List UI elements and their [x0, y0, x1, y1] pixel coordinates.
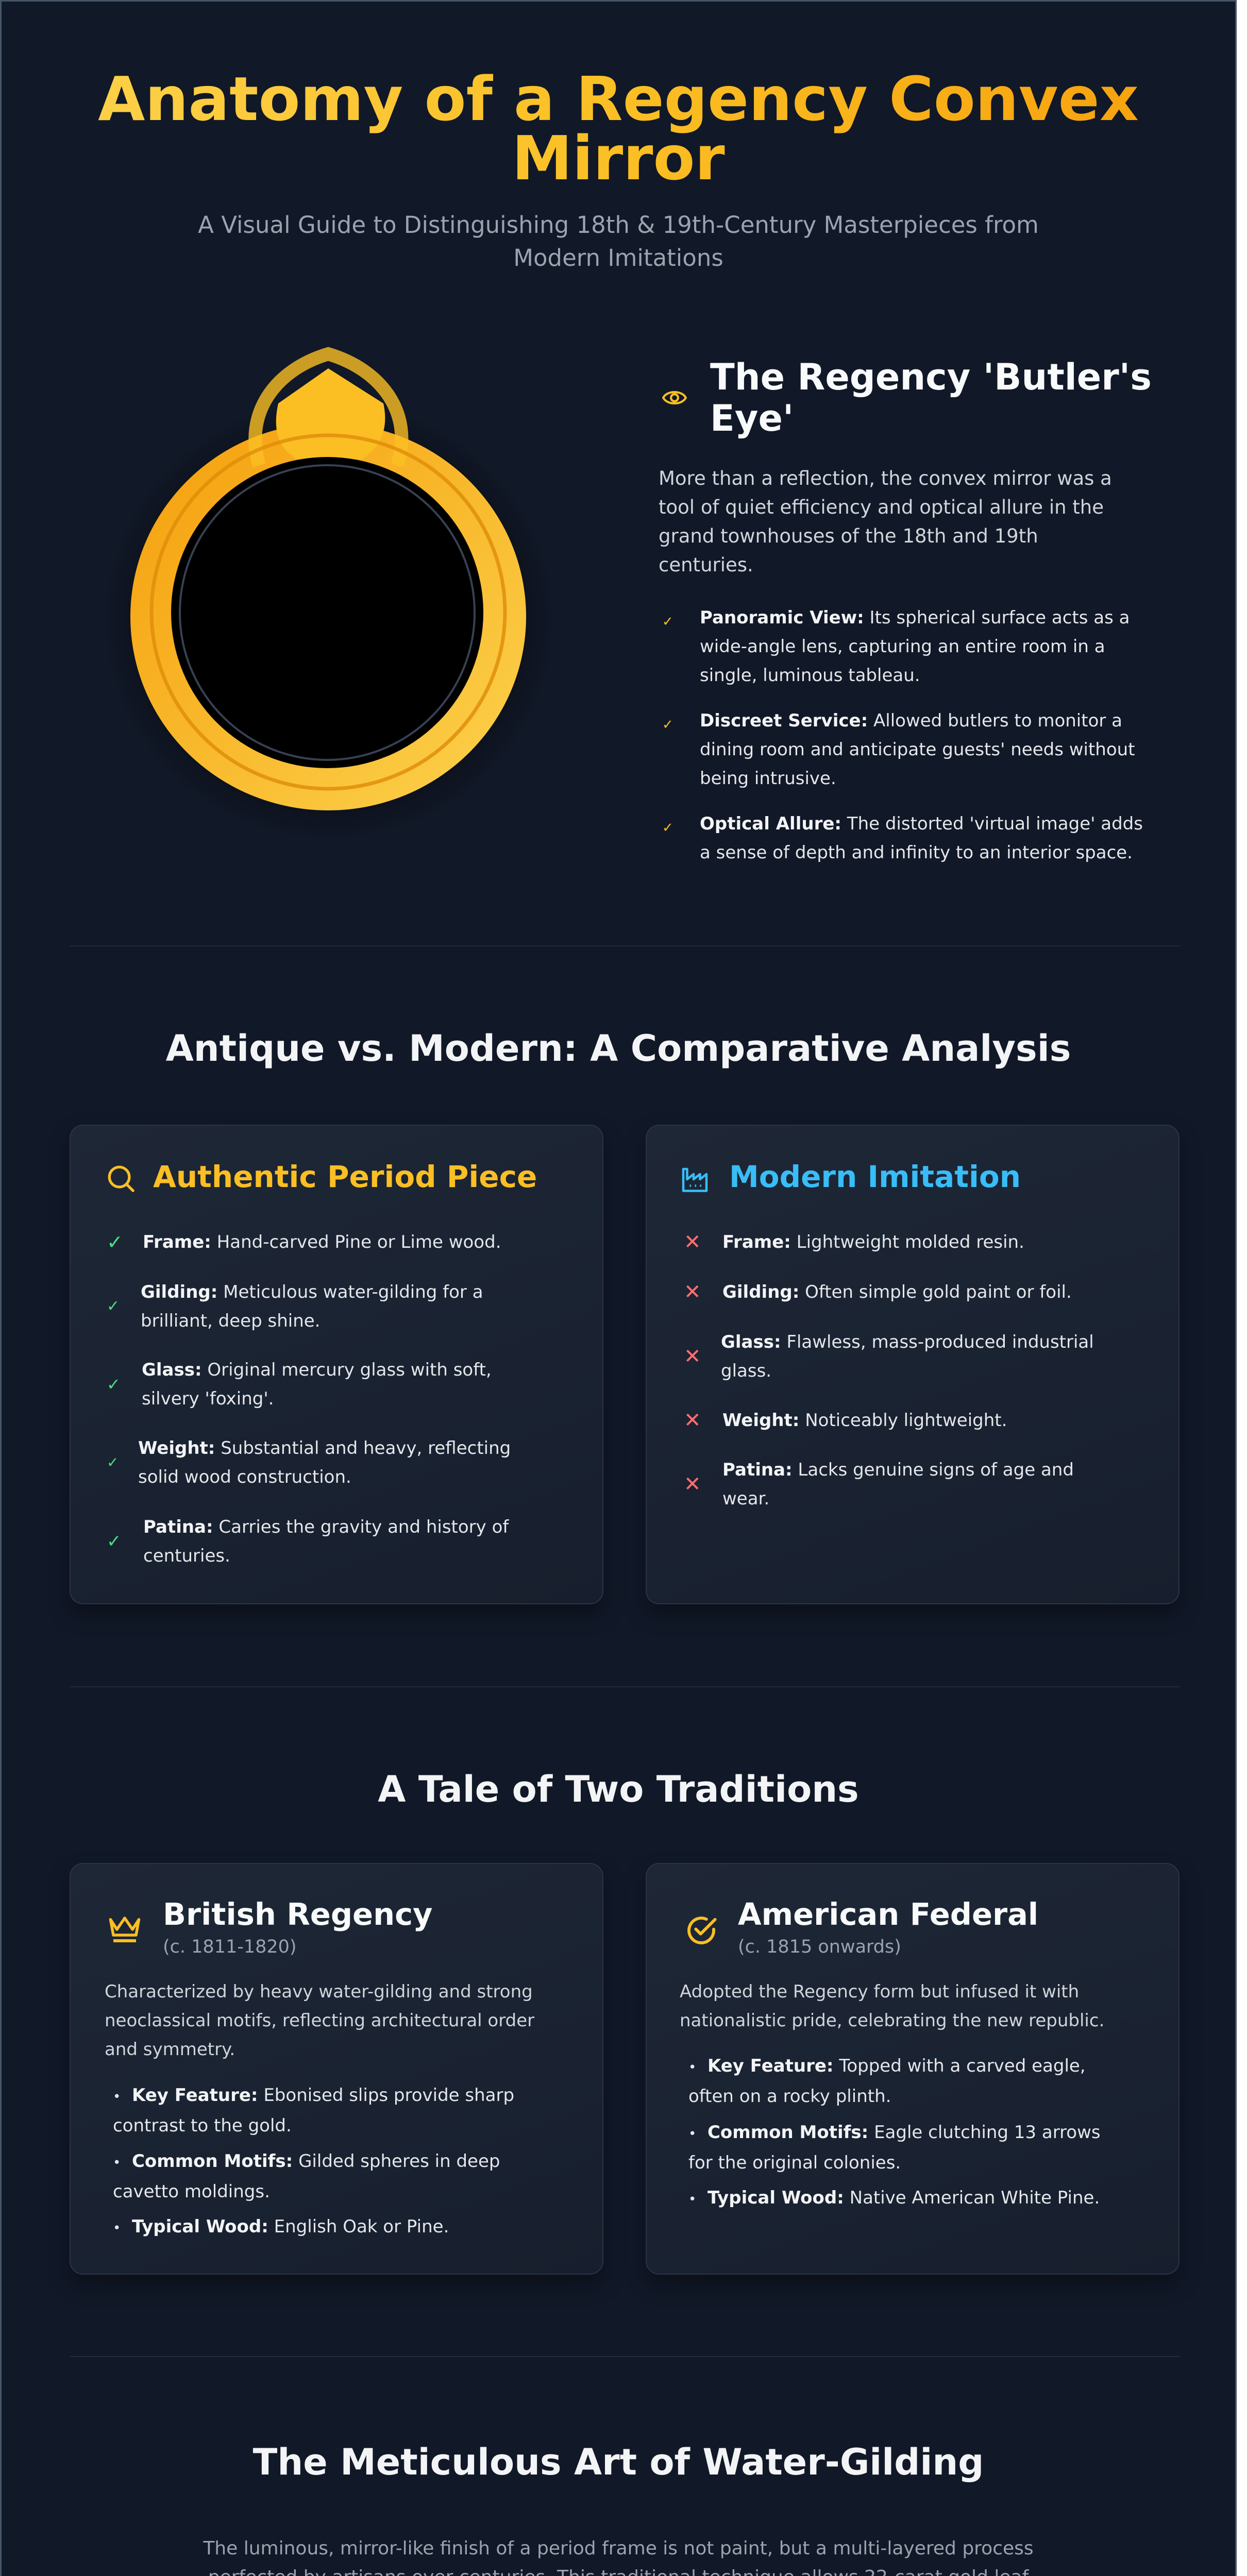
- list: hero bullets: Panoramic View: Its spherical surface acts as a: [700, 607, 1130, 628]
- list: features: [688, 2052, 1086, 2111]
- item: gilding: [107, 1282, 483, 1331]
- panel: modern imitation: Gilding: Often simple gold paint or foil.: [722, 1282, 1072, 1302]
- item: weight: [107, 1438, 511, 1487]
- panel: authentic period piece: ✓: [107, 1297, 120, 1315]
- icon: crown: [109, 1917, 140, 1942]
- list: hero bullets: single, luminous tableau.: [700, 665, 920, 686]
- date: (c. 1815 onwards): [738, 1937, 901, 1957]
- text: description: Adopted the Regency form but infused it with: [680, 1981, 1079, 2002]
- panel: authentic period piece: brilliant, deep shine.: [141, 1311, 320, 1331]
- panel: british regency: • Common Motifs: Gilded spheres in deep: [113, 2151, 500, 2172]
- list: features: often on a rocky plinth.: [688, 2086, 891, 2107]
- icon: factory: [682, 1167, 708, 1192]
- heading: butler's eye: The Regency 'Butler's: [710, 356, 1152, 398]
- heading: authentic: Authentic Period Piece: [153, 1159, 537, 1194]
- heading: antique vs modern: Antique vs. Modern: A Comparative Analysis: [166, 1027, 1071, 1070]
- text: description: neoclassical motifs, reflecting architectural order: [105, 2010, 534, 2031]
- panel: authentic period piece: ✓: [107, 1375, 121, 1394]
- list: hero bullets: Discreet Service: Allowed butlers to monitor a: [700, 710, 1122, 731]
- panel: authentic period piece: ✓: [107, 1531, 122, 1552]
- panel: authentic period piece: Patina: Carries the gravity and history of: [143, 1517, 509, 1537]
- heading: butler's eye: Eye': [710, 397, 794, 439]
- panel: modern imitation: Glass: Flawless, mass-produced industrial: [721, 1332, 1094, 1352]
- list: hero bullets: Optical Allure: The distorted 'virtual image' adds: [700, 814, 1143, 834]
- bullet: panoramic view: [662, 607, 1130, 686]
- panel: authentic period piece: [70, 1125, 603, 1604]
- panel: modern imitation: ✕: [684, 1230, 701, 1254]
- panel: authentic period piece: Frame: Hand-carved Pine or Lime wood.: [143, 1232, 501, 1252]
- panel: authentic period piece: ✓: [107, 1231, 123, 1253]
- text: hero paragraph: tool of quiet efficiency and optical allure in the: [659, 496, 1104, 518]
- panel: american federal: [646, 1863, 1179, 2275]
- panel: authentic period piece: ✓: [107, 1454, 119, 1471]
- icon: eye: [662, 391, 687, 404]
- title: Anatomy of a Regency Convex: [98, 63, 1139, 134]
- panel: modern imitation: Patina: Lacks genuine signs of age and: [722, 1460, 1074, 1480]
- item: patina: [684, 1460, 1074, 1509]
- heading: modern: Modern Imitation: [729, 1159, 1021, 1194]
- item: frame: [684, 1230, 1024, 1254]
- list: hero bullets: wide-angle lens, capturing an entire room in a: [700, 636, 1105, 657]
- panel: authentic period piece: Gilding: Meticulous water-gilding for a: [141, 1282, 483, 1302]
- text: description: Characterized by heavy water-gilding and strong: [105, 1981, 533, 2002]
- subtitle: [198, 211, 1039, 272]
- panel: modern imitation: glass.: [721, 1361, 771, 1381]
- text: description: nationalistic pride, celebrating the new republic.: [680, 2010, 1104, 2031]
- panel: american federal: for the original colonies.: [688, 2153, 901, 2173]
- heading: british regency: British Regency: [163, 1896, 433, 1932]
- title: [2, 70, 1235, 188]
- panel: modern imitation: [646, 1125, 1179, 1604]
- list: hero bullets: ✓: [662, 820, 673, 836]
- date: (c. 1811-1820): [163, 1937, 297, 1957]
- panel: american federal: • Common Motifs: Eagle clutching 13 arrows: [688, 2122, 1101, 2143]
- icon: check circle: [687, 1917, 717, 1944]
- list: hero bullets: ✓: [662, 717, 673, 733]
- icon: magnifier: [108, 1165, 134, 1192]
- text: description: [105, 1981, 535, 2060]
- item: patina: [107, 1517, 509, 1566]
- item: frame: [107, 1231, 501, 1253]
- panel: authentic period piece: centuries.: [143, 1546, 230, 1566]
- item: glass: [107, 1360, 492, 1409]
- panel: modern imitation: Frame: Lightweight molded resin.: [722, 1232, 1024, 1252]
- panel: authentic period piece: Weight: Substantial and heavy, reflecting: [138, 1438, 511, 1459]
- item: glass: [684, 1332, 1094, 1381]
- item: gilding: [684, 1280, 1072, 1304]
- bullet: optical allure: [662, 814, 1143, 863]
- panel: british regency: • Typical Wood: English Oak or Pine.: [113, 2216, 449, 2237]
- panel: modern imitation: ✕: [684, 1345, 701, 1368]
- panel: british regency: [70, 1863, 603, 2275]
- panel: modern imitation: ✕: [684, 1409, 701, 1432]
- panel: authentic period piece: Glass: Original mercury glass with soft,: [142, 1360, 492, 1380]
- text: hero paragraph: More than a reflection, the convex mirror was a: [659, 467, 1112, 489]
- text: description: [680, 1977, 1104, 2035]
- panel: authentic period piece: silvery 'foxing'.: [142, 1388, 274, 1409]
- text: hero paragraph: [659, 467, 1112, 576]
- list: features: • Key Feature: Ebonised slips provide sharp: [113, 2085, 514, 2106]
- subtitle: Modern Imitations: [513, 244, 723, 272]
- list: features: • Key Feature: Topped with a carved eagle,: [688, 2056, 1086, 2076]
- list: hero bullets: ✓: [662, 614, 673, 630]
- bullet: discreet service: [662, 710, 1135, 789]
- list: features: contrast to the gold.: [113, 2115, 292, 2136]
- heading: american federal: American Federal: [738, 1896, 1038, 1932]
- title: Mirror: [512, 123, 725, 194]
- list: features: [113, 2085, 514, 2136]
- heading: water gilding: The Meticulous Art of Water-Gilding: [253, 2441, 984, 2483]
- list: hero bullets: being intrusive.: [700, 768, 836, 789]
- text: gilding intro: [2, 2534, 1235, 2576]
- illustration: convex mirror: [130, 347, 528, 814]
- text: gilding intro: The luminous, mirror-like finish of a period frame is not paint, but a multi-layered process: [203, 2538, 1034, 2559]
- heading: two traditions: A Tale of Two Traditions: [378, 1768, 859, 1810]
- panel: modern imitation: ✕: [684, 1472, 701, 1496]
- panel: american federal: • Typical Wood: Native American White Pine.: [688, 2188, 1100, 2208]
- panel: modern imitation: Weight: Noticeably lightweight.: [722, 1410, 1007, 1431]
- panel: modern imitation: wear.: [722, 1488, 769, 1509]
- list: hero bullets: [662, 607, 1143, 863]
- panel: modern imitation: ✕: [684, 1280, 701, 1304]
- subtitle: A Visual Guide to Distinguishing 18th & 19th-Century Masterpieces from: [198, 211, 1039, 239]
- panel: british regency: cavetto moldings.: [113, 2181, 270, 2202]
- text: hero paragraph: grand townhouses of the 18th and 19th: [659, 525, 1038, 547]
- panel: authentic period piece: solid wood construction.: [138, 1467, 351, 1487]
- list: hero bullets: a sense of depth and infinity to an interior space.: [700, 842, 1133, 863]
- heading: butler's eye: [710, 356, 1152, 439]
- list: hero bullets: dining room and anticipate guests' needs without: [700, 739, 1135, 760]
- text: hero paragraph: centuries.: [659, 554, 753, 576]
- item: weight: [684, 1409, 1007, 1432]
- text: description: and symmetry.: [105, 2039, 235, 2060]
